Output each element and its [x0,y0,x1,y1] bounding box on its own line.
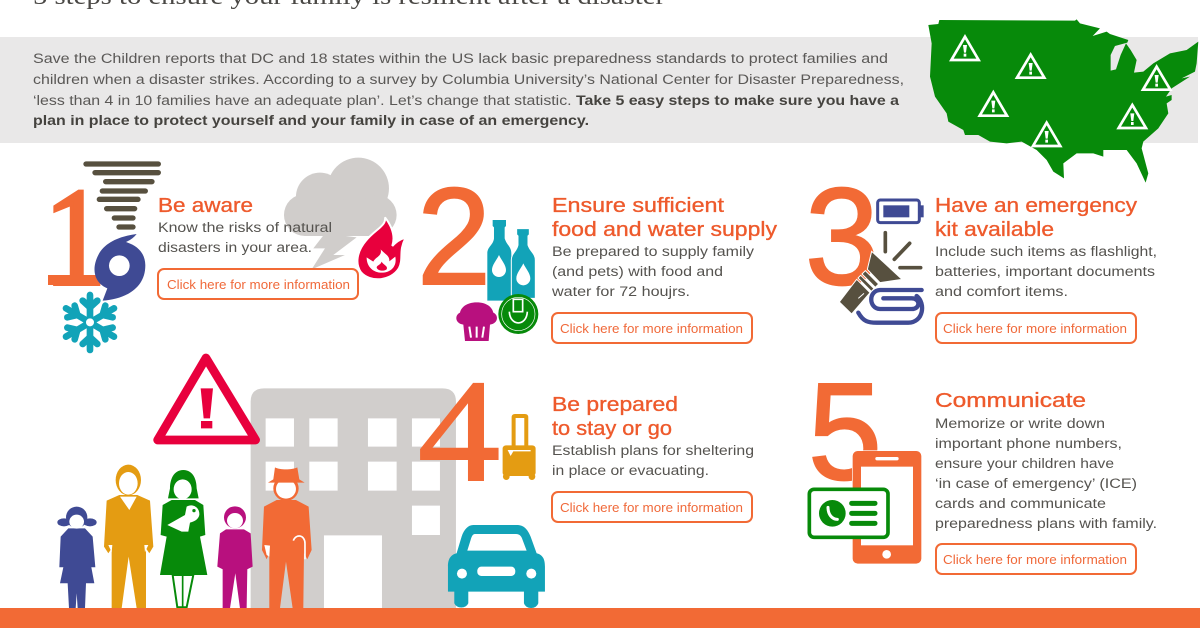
link button: Click here for more information [560,322,743,336]
body text: Know the risks of natural [158,220,332,236]
body text: Include such items as flashlight, [935,244,1157,260]
heading [552,393,678,440]
body text: Establish plans for sheltering [552,443,754,459]
panel: step 5 [808,355,1157,574]
intro text: ‘less than 4 in 10 families have an adequate plan’. Let’s change that statistic. Take 5 easy steps to make sure you have a [33,93,899,109]
body text: important phone numbers, [935,436,1122,452]
heading: Have an emergency [935,194,1138,217]
body text: (and pets) with food and [552,264,723,280]
link button [552,492,752,522]
footer bar [0,608,1200,628]
body text: water for 72 houjrs. [551,284,690,300]
intro text: children when a disaster strikes. According to a survey by Columbia University’s National Center for Disaster Preparedness, [33,72,904,88]
figure: girl [57,507,97,608]
body text [935,244,1157,300]
body text [552,443,754,479]
panel: step 2 [417,160,778,343]
number 1: 1 [44,160,106,315]
number 4: 4 [418,350,500,512]
body text: batteries, important documents [935,264,1155,280]
link button: Click here for more information [167,278,350,292]
link button: Click here for more information [560,501,743,515]
icon: US map with warnings [928,19,1198,183]
heading: Be aware [158,194,253,217]
link button [936,544,1136,574]
body text: ensure your children have [935,456,1114,472]
body text: ‘in case of emergency’ (ICE) [935,476,1137,492]
icon: suitcase [503,416,536,480]
link button: Click here for more information [943,322,1127,336]
icon: car [448,525,545,608]
icon: disasters [66,158,406,350]
link button [158,269,358,299]
body text [551,244,755,300]
figure: old man with cane [262,467,312,608]
link button [552,313,752,343]
link button: Click here for more information [943,553,1127,567]
panel: step 3 [805,160,1157,343]
intro text: plan in place to protect yourself and your family in case of an emergency. [33,113,589,129]
body text: preparedness plans with family. [935,516,1157,532]
icon: warning triangle [158,358,256,440]
figure: man [104,465,153,608]
illustration: family and building [57,358,545,608]
number 3: 3 [805,160,879,314]
figure: child [217,506,253,608]
heading: Communicate [935,389,1086,412]
body text: Memorize or write down [935,416,1105,432]
link button [936,313,1136,343]
body text [158,220,332,256]
body text: disasters in your area. [158,240,312,256]
icon: water and food [456,220,538,341]
body text: cards and communicate [935,496,1106,512]
panel: intro band [0,37,1198,143]
heading [935,194,1138,241]
intro text: Save the Children reports that DC and 18 states within the US lack basic preparedness standards to protect families and [33,51,888,67]
panel: step 1 [44,158,406,350]
panel: step 4 [418,350,754,522]
heading: Ensure sufficient [552,194,724,217]
intro text [33,51,904,129]
number 2: 2 [417,160,491,314]
heading [552,194,778,241]
body text [935,416,1157,532]
icon: phone and ICE card [809,451,922,564]
heading: kit available [935,218,1054,241]
heading: to stay or go [552,417,672,440]
heading: Be prepared [552,393,678,416]
icon: emergency kit [839,200,924,323]
heading: food and water supply [552,218,778,241]
body text: and comfort items. [935,284,1068,300]
number 5: 5 [808,355,882,509]
body text: in place or evacuating. [552,463,709,479]
icon: building [251,388,456,608]
figure: woman with baby [160,470,207,607]
body text: Be prepared to supply family [552,244,755,260]
